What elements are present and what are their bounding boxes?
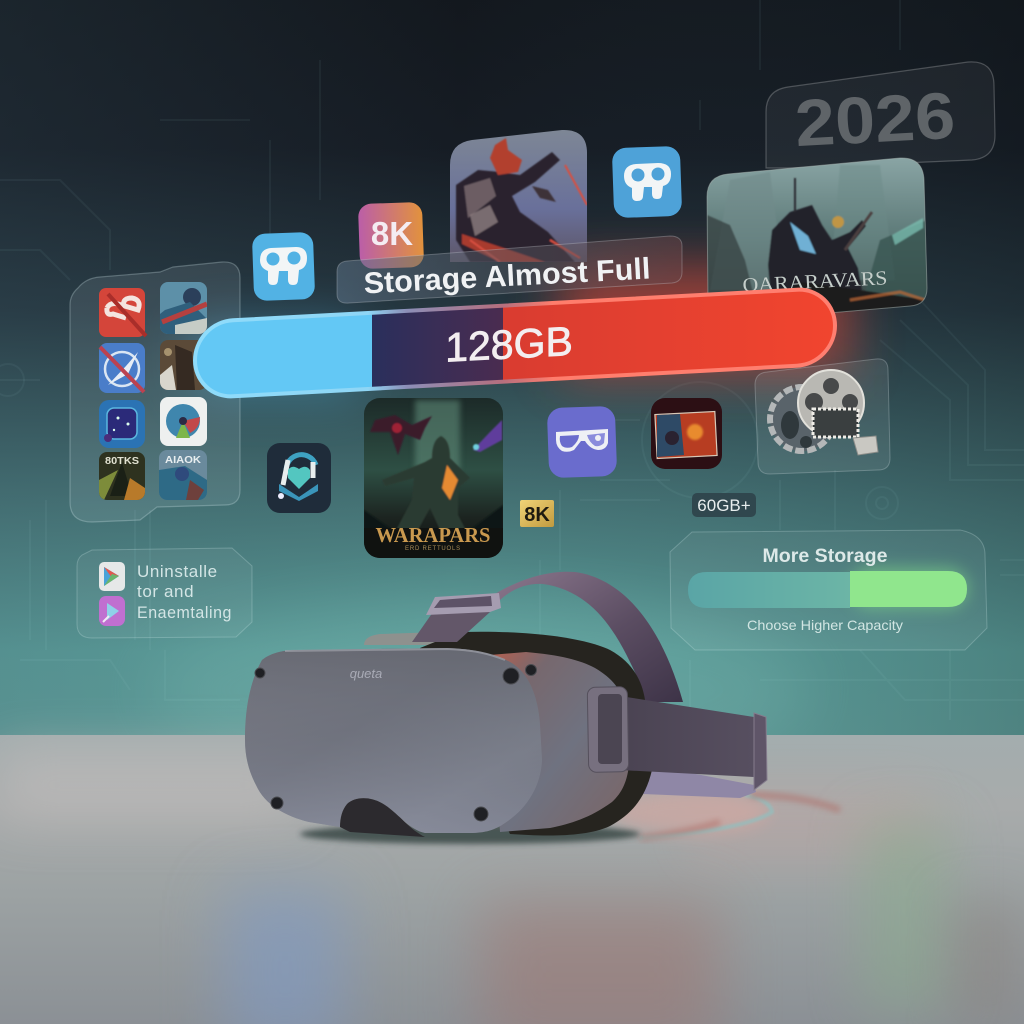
panel: film reel [755, 359, 890, 474]
panel: more storage: Choose Higher Capacity [747, 617, 903, 633]
grey top piece [364, 632, 470, 645]
uninstall text [137, 562, 232, 622]
tile: 8K gradient [358, 202, 424, 269]
capacity bar [688, 571, 967, 608]
badge: gold 8K: 8K [524, 504, 550, 526]
game thumbnail: blue racer [160, 282, 207, 334]
icon: play store white [99, 562, 125, 591]
panel: more storage [670, 530, 987, 650]
icon: film reel [770, 370, 878, 455]
app icon: white disc [160, 397, 207, 446]
head strap and buckle [412, 593, 501, 642]
panel: more storage: More Storage [762, 546, 888, 567]
headset brand: queta [350, 666, 382, 681]
side strap [620, 696, 767, 790]
icon: play store purple [99, 596, 125, 626]
tile: 8K gradient: 8K [371, 215, 413, 252]
side clip [587, 687, 629, 772]
card: 2026 year [766, 62, 995, 168]
VR headset [245, 572, 767, 837]
game thumbnail: blue robot: AIAOK [165, 455, 202, 466]
background wall [0, 0, 1024, 780]
game thumbnail: dark tower [99, 452, 145, 500]
game art card: WARAPARS cover: WARAPARS [376, 523, 490, 547]
tracking sensors [255, 664, 536, 821]
icon: small game tile [651, 398, 722, 469]
game thumbnail: sepia ruins [160, 340, 207, 390]
floor light ring and shadow [300, 790, 840, 844]
glow: green bar [850, 568, 968, 608]
uninstall text: Uninstalle [137, 562, 218, 581]
lower strap band [643, 765, 756, 798]
game thumbnail: blue robot [159, 450, 207, 500]
badge: 60GB+: 60GB+ [697, 496, 751, 515]
floor surface [0, 735, 1024, 1024]
game thumbnail: dark tower: 80TKS [105, 456, 139, 467]
badge: 60GB+ [692, 493, 756, 517]
dark facial rim [420, 632, 652, 836]
red and blue bar glow [190, 265, 850, 395]
app icon: blue compass crossed [99, 343, 145, 393]
uninstall text: tor and [137, 582, 194, 601]
game art card: right landscape: OARARAVARS [742, 267, 888, 297]
game art card: right landscape [706, 158, 928, 313]
tile: blue app top right [612, 146, 682, 218]
rear top strap [490, 572, 683, 702]
app icon: red crossed [99, 288, 146, 337]
storage bar: 128GB [195, 288, 835, 398]
storage bar: 128GB: 128GB [445, 318, 573, 371]
panel: uninstall tip [77, 548, 252, 638]
icon: purple goggles tile [547, 406, 617, 478]
game art card: warrior top centre [450, 128, 588, 263]
tile: blue app left [252, 232, 315, 301]
panel: left app library [70, 262, 240, 522]
badge: gold 8K [520, 500, 554, 527]
nose notch [340, 798, 425, 837]
card: 2026 year: 2026 [793, 78, 957, 160]
panel: storage almost full [337, 236, 682, 303]
circuit board line pattern [0, 0, 1024, 720]
panel: storage almost full: Storage Almost Full [363, 253, 651, 300]
game art card: WARAPARS cover: ERD RETTUOLS [405, 546, 461, 552]
game art card: WARAPARS cover [364, 398, 503, 560]
icon: heart app tile [267, 443, 331, 513]
uninstall text: Enaemtaling [137, 603, 232, 622]
front visor [245, 648, 542, 833]
app icon: galaxy [99, 400, 145, 448]
side shell [490, 652, 630, 832]
